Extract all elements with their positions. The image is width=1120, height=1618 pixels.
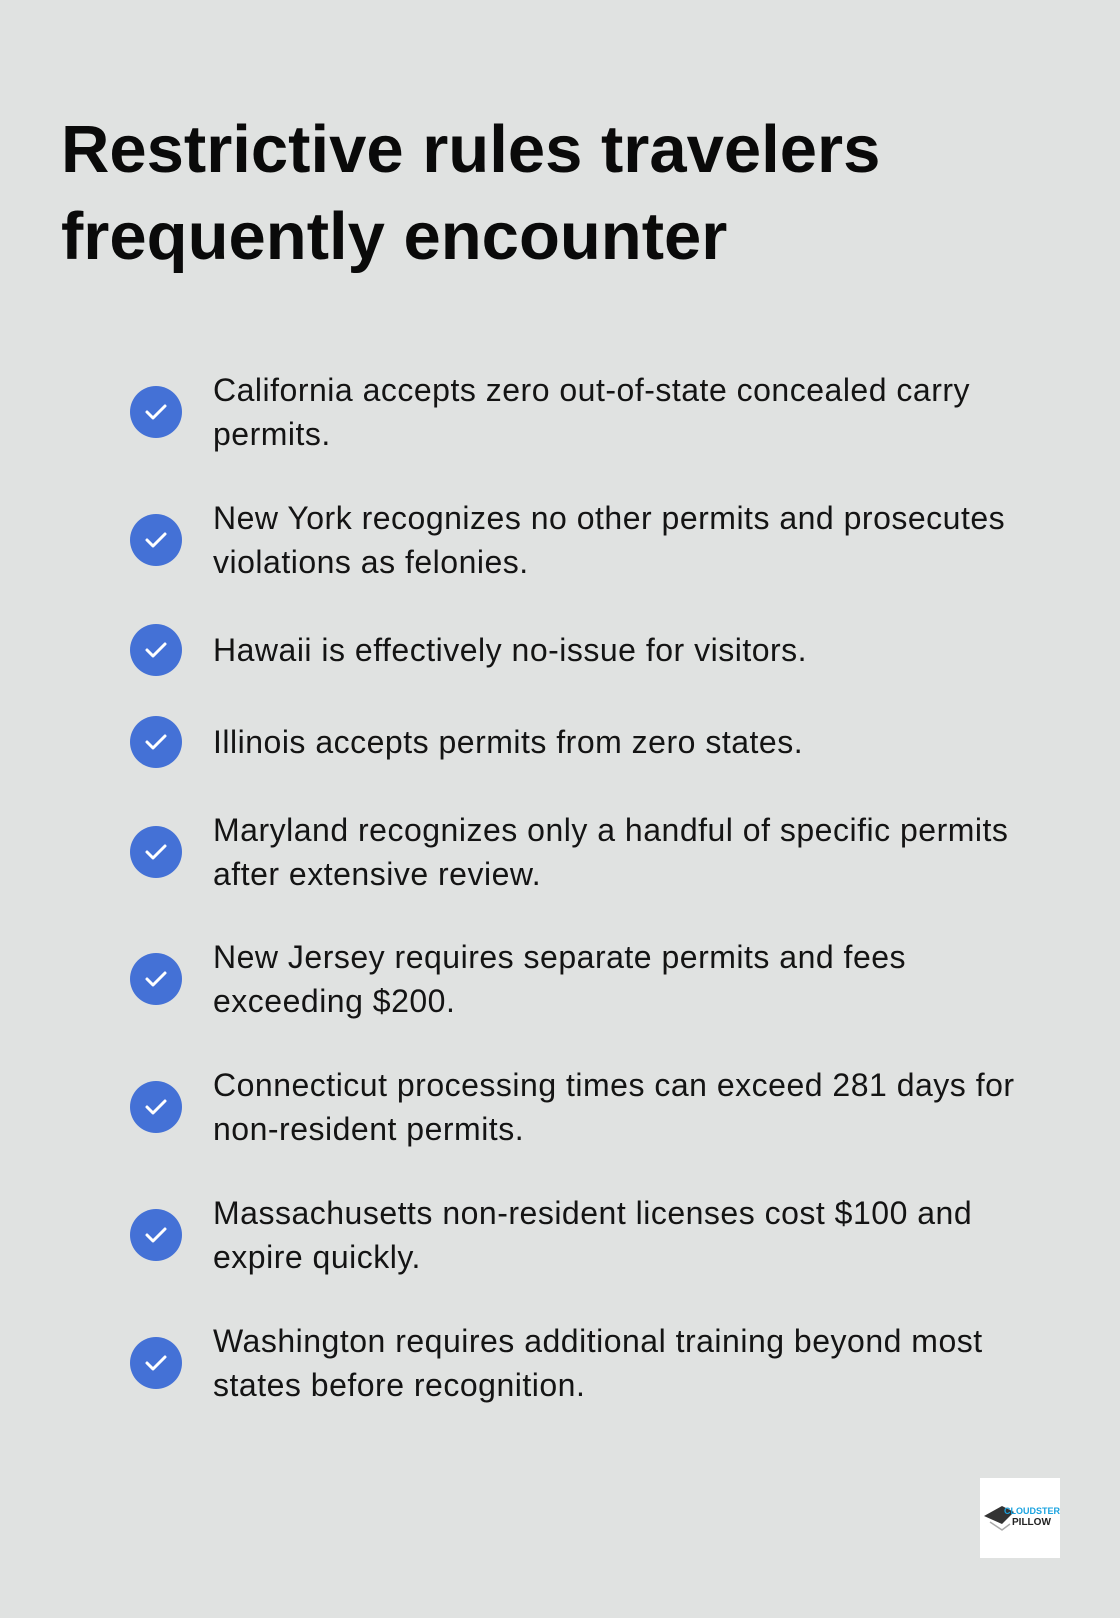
item: Hawaii [130,624,807,676]
item: New York [130,500,1005,580]
item: Connecticut [130,1067,1015,1147]
item: Washington: states before recognition. [213,1367,585,1403]
item: Connecticut: Connecticut processing times can exceed 281 days for [213,1067,1015,1103]
title: Restrictive rules travelers [61,112,880,187]
item: Maryland: Maryland recognizes only a handful of specific permits [213,812,1008,848]
item: New Jersey: New Jersey requires separate permits and fees [213,939,906,975]
item: New York: violations as felonies. [213,544,529,580]
logo: CLOUDSTER [1004,1506,1060,1516]
item: New Jersey: exceeding $200. [213,983,455,1019]
item: California: California accepts zero out-of-state concealed carry [213,372,970,408]
title [61,112,880,274]
item: California: permits. [213,416,331,452]
item: Massachusetts: expire quickly. [213,1239,421,1275]
title: frequently encounter [61,199,727,274]
logo [980,1478,1060,1558]
item: New York: New York recognizes no other permits and prosecutes [213,500,1005,536]
item: Maryland: after extensive review. [213,856,541,892]
item: Connecticut: non-resident permits. [213,1111,524,1147]
item: Maryland [130,812,1008,892]
item: Illinois: Illinois accepts permits from zero states. [213,724,803,760]
item: Massachusetts [130,1195,972,1275]
item: Illinois [130,716,803,768]
item: Massachusetts: Massachusetts non-resident licenses cost $100 and [213,1195,972,1231]
item: California [130,372,970,452]
item: Hawaii: Hawaii is effectively no-issue for visitors. [213,632,807,668]
item: Washington: Washington requires additional training beyond most [213,1323,983,1359]
item: New Jersey [130,939,906,1019]
logo: PILLOW [1012,1517,1051,1528]
item: Washington [130,1323,983,1403]
